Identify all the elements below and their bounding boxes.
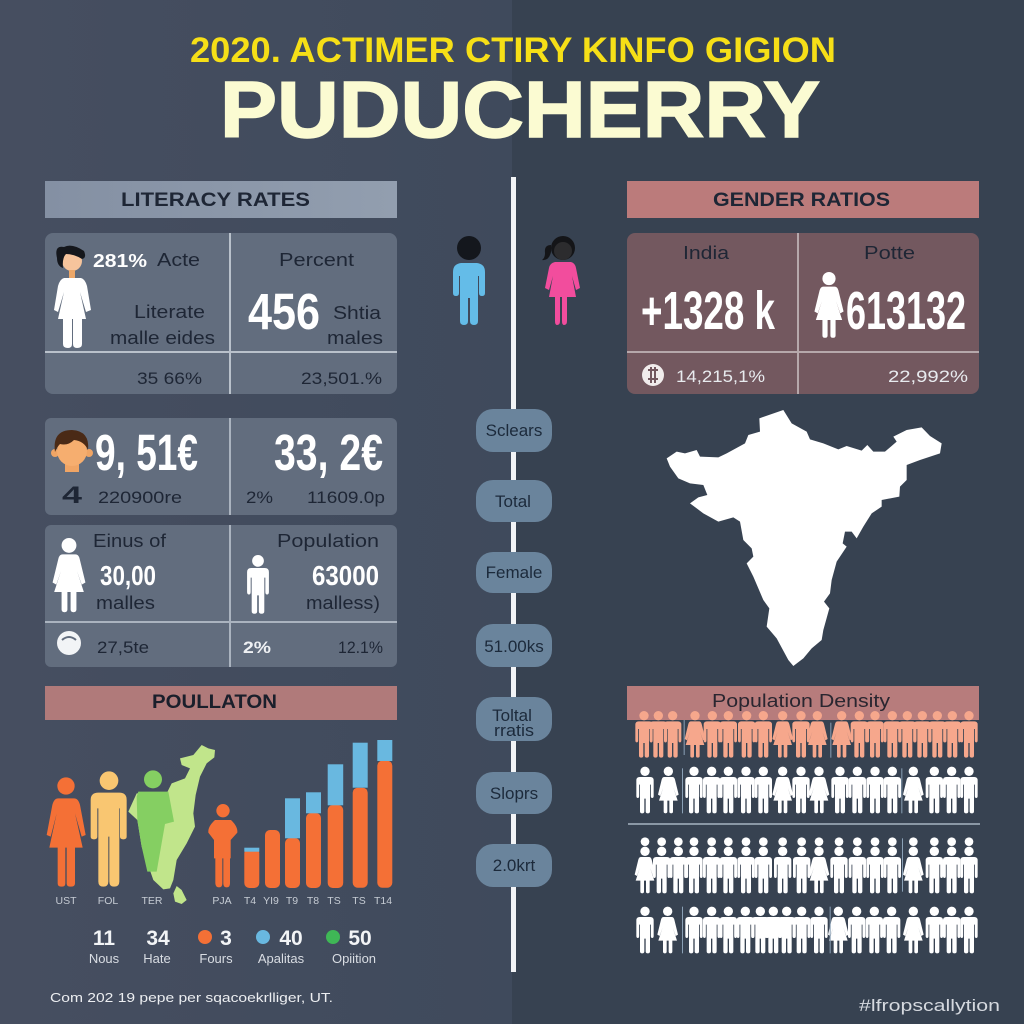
heading: gender ratios: GENDER RATIOS — [713, 189, 890, 211]
heading: literacy rates — [45, 181, 397, 218]
axis labels — [56, 895, 392, 907]
card: gender figures — [627, 233, 979, 394]
icon: coin — [642, 364, 664, 386]
bar chart — [244, 740, 392, 888]
card: counts: 4 — [62, 482, 83, 509]
card: literacy figures: Shtia — [333, 303, 382, 323]
heading: population density — [627, 686, 979, 720]
legend: 11 — [93, 927, 115, 950]
axis labels: T14 — [374, 895, 392, 907]
card: literacy figures: 35 66% — [137, 369, 202, 388]
row 1 — [635, 711, 978, 758]
card: counts: 9, 51€ — [95, 424, 198, 481]
subtitle: 2020. ACTIMER CTIRY KINFO GIGION — [190, 31, 836, 70]
card: gender figures: 14,215,1% — [676, 367, 765, 386]
legend: 50 — [348, 927, 372, 950]
pill: Total ratis: rratis — [494, 721, 534, 740]
row 3 — [635, 837, 978, 893]
row 4 — [636, 907, 978, 953]
card: literacy figures: Percent — [279, 250, 354, 270]
pill: Sloprs: Sloprs — [490, 784, 538, 803]
map: India — [667, 410, 942, 666]
axis labels: TS — [327, 895, 341, 907]
hashtag: #lfropscallytion — [859, 996, 1000, 1015]
heading: population: POULLATON — [152, 691, 277, 713]
main title: PUDUCHERRY — [220, 65, 820, 154]
card: census: 12.1% — [338, 638, 383, 657]
axis labels: FOL — [98, 895, 118, 907]
axis labels: T8 — [307, 895, 319, 907]
card: gender figures: 613132 — [846, 281, 966, 341]
pill: Sloprs — [476, 772, 552, 814]
central divider — [511, 177, 516, 972]
legend: Nous — [89, 951, 120, 966]
figure: orange woman — [47, 777, 86, 887]
pill: 2.0krt: 2.0krt — [493, 856, 536, 875]
card: literacy figures: 281% — [93, 251, 147, 271]
card: counts: 2% — [246, 488, 273, 507]
heading: population — [45, 686, 397, 720]
pill: 2.0krt — [476, 844, 552, 887]
axis labels: PJA — [212, 895, 232, 907]
axis labels: UST — [56, 895, 77, 907]
center pills — [476, 409, 552, 887]
panel: population — [45, 686, 397, 966]
card: census: 30,00 — [100, 560, 156, 591]
legend: Opiition — [332, 951, 376, 966]
card: census: 63000 — [312, 560, 379, 591]
card: gender figures: 22,992% — [888, 367, 968, 386]
pill: Total ratis: Toltal — [492, 706, 532, 725]
card: literacy figures: Literate — [134, 302, 205, 322]
card: census: Population — [277, 531, 379, 551]
legend — [89, 927, 376, 966]
legend: Fours — [199, 951, 233, 966]
pill: Total: Total — [495, 492, 531, 511]
legend: 3 — [220, 927, 232, 950]
axis labels: YI9 — [263, 895, 279, 907]
card: census — [45, 525, 397, 667]
background right — [512, 0, 1024, 1024]
card: counts: 33, 2€ — [274, 424, 383, 481]
card: literacy figures: 456 — [248, 283, 320, 340]
footer note: Com 202 19 pepe per sqacoekrlliger, UT. — [50, 990, 333, 1005]
icon: head — [57, 631, 81, 655]
figure: tan man — [91, 771, 127, 887]
legend: Apalitas — [258, 951, 305, 966]
pill: Female: Female — [486, 563, 542, 582]
icon: boy — [453, 236, 485, 325]
card: gender figures: India — [683, 243, 730, 263]
card: census: 27,5te — [97, 638, 149, 657]
row 2 — [636, 767, 978, 813]
icon: woman — [54, 246, 91, 348]
icon: female — [53, 538, 85, 612]
heading: literacy rates: LITERACY RATES — [121, 189, 310, 211]
figures and map group — [47, 745, 237, 904]
card: literacy figures — [45, 233, 397, 394]
icon: male — [247, 555, 269, 614]
card: census: Einus of — [93, 531, 167, 551]
background left — [0, 0, 512, 1024]
card: literacy figures: males — [327, 328, 383, 348]
figure: small orange person — [208, 804, 237, 887]
pictogram rows — [628, 711, 980, 953]
card: counts: 220900re — [98, 488, 182, 507]
axis labels: TER — [142, 895, 163, 907]
panel: population density — [627, 686, 980, 953]
pill: 51.00ks: 51.00ks — [484, 637, 544, 656]
pill: 51.00ks — [476, 624, 552, 667]
legend: 40 — [279, 927, 303, 950]
map: regional green — [128, 745, 215, 904]
icon: girl — [542, 236, 580, 325]
card: gender figures: Potte — [864, 243, 915, 263]
pill: Sclears — [476, 409, 552, 452]
title — [190, 31, 836, 154]
panel: gender ratios — [627, 181, 979, 394]
legend: 34 — [146, 927, 170, 950]
panel: literacy rates — [45, 181, 397, 394]
icon: person — [814, 272, 844, 338]
card: gender figures: +1328 k — [641, 281, 776, 341]
pill: Total ratis — [476, 697, 552, 741]
card: census: 2% — [243, 638, 271, 657]
card: literacy figures: malle eides — [110, 328, 215, 348]
pill: Total — [476, 480, 552, 522]
heading: gender ratios — [627, 181, 979, 218]
card: counts: 11609.0p — [307, 488, 385, 507]
card: census: malless) — [306, 593, 380, 613]
legend: Hate — [143, 951, 171, 966]
card: counts — [45, 418, 397, 515]
axis labels: T4 — [244, 895, 256, 907]
heading: population density: Population Density — [712, 691, 890, 711]
card: census: malles — [96, 593, 155, 613]
card: literacy figures: Acte — [157, 250, 200, 270]
icon: child face — [51, 430, 93, 472]
axis labels: T9 — [286, 895, 298, 907]
card: literacy figures: 23,501.% — [301, 369, 382, 388]
pill: Female — [476, 552, 552, 593]
axis labels: TS — [352, 895, 366, 907]
figure: green person — [137, 770, 174, 872]
pill: Sclears: Sclears — [486, 421, 542, 440]
